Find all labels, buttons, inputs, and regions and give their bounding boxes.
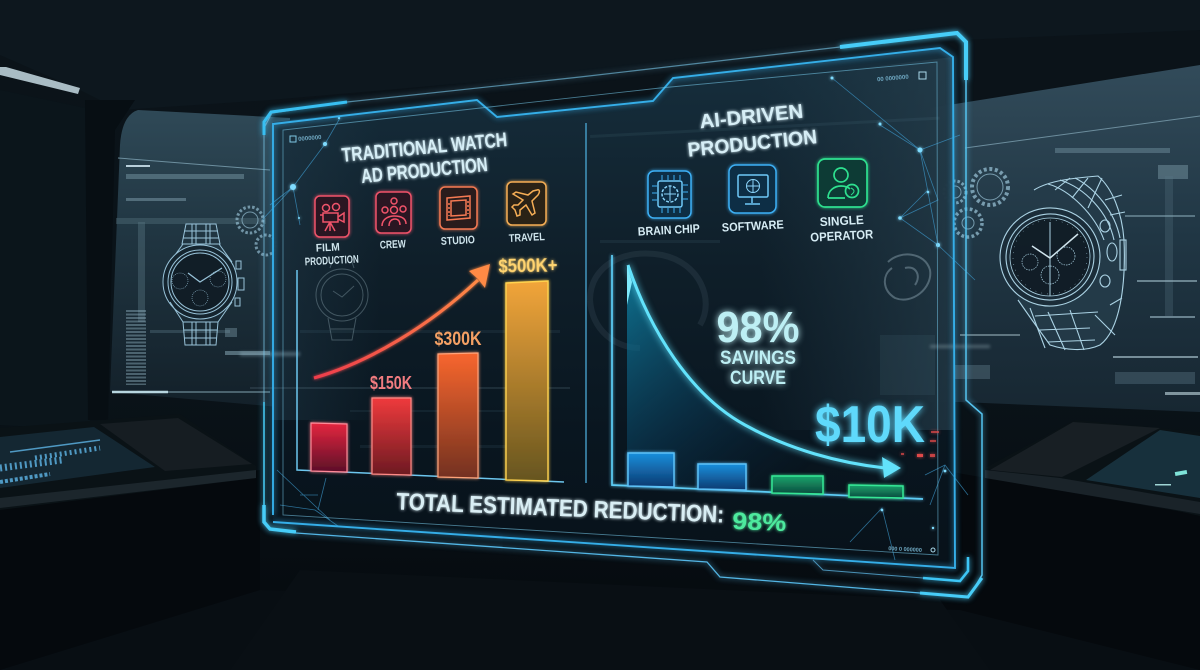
label: film production: PRODUCTION: [305, 254, 359, 268]
heading: traditional: AD PRODUCTION: [360, 154, 489, 188]
faint globe ghost inside panel: [590, 253, 706, 348]
gears right: [944, 169, 1008, 237]
icon: software: [729, 165, 776, 213]
bar 2: [372, 398, 411, 475]
axis: [297, 270, 564, 482]
callout: 98% savings curve: [716, 303, 800, 389]
heading: traditional: TRADITIONAL WATCH: [341, 129, 508, 167]
area under savings curve: [627, 265, 885, 490]
frame corner marks: 00 0000000: [877, 75, 910, 83]
chart: traditional costs: [297, 255, 564, 482]
frame corner marks: [290, 72, 935, 554]
icon: brain chip: [648, 171, 691, 218]
heading: AI-driven: AI-DRIVEN: [699, 101, 804, 133]
panel frame: [264, 33, 982, 597]
value $150K: $150K: [370, 373, 412, 393]
bar 1: [311, 423, 347, 472]
right holographic window: [930, 65, 1200, 412]
label: single operator: [810, 213, 874, 245]
ceiling light strip: [0, 67, 80, 94]
label: film production: FILM: [316, 241, 340, 255]
label: software: SOFTWARE: [721, 217, 784, 235]
label: brain chip: BRAIN CHIP: [637, 221, 700, 239]
frame corner marks: 000 0 000000: [888, 546, 922, 554]
icon: travel: [507, 182, 546, 225]
bar 3: [438, 353, 478, 478]
bar 1: [628, 453, 674, 487]
bar 3: [772, 476, 823, 494]
total reduction statement: TOTAL ESTIMATED REDUCTION:: [396, 488, 725, 529]
panel divider: [585, 123, 587, 483]
label: studio: STUDIO: [441, 234, 475, 248]
rising cost arrow: [314, 264, 490, 378]
icon: crew: [376, 192, 411, 233]
label: film production: [305, 241, 359, 268]
bar 2: [698, 464, 746, 490]
curve base wedge: [627, 265, 632, 305]
faint gear ghost inside panel: [885, 254, 930, 300]
savings curve arrow: [628, 265, 901, 478]
value $500K+: $500K+: [498, 255, 558, 278]
red indicator lights: [901, 431, 939, 457]
label: single operator: SINGLE: [819, 213, 864, 229]
inner thin frame: [283, 62, 938, 555]
icon: film production: [315, 196, 349, 237]
callout: 98% savings curve: SAVINGS: [720, 348, 796, 369]
right console: [985, 420, 1200, 516]
label: crew: CREW: [380, 238, 407, 252]
heading: AI-driven: [687, 101, 818, 162]
label: travel: TRAVEL: [509, 231, 545, 245]
total reduction statement: 98%: [732, 508, 787, 537]
callout: 98% savings curve: CURVE: [730, 368, 786, 389]
bar 4: [506, 281, 548, 481]
faint watch ghost inside panel: [316, 262, 368, 340]
wireframe watch right: [994, 176, 1126, 350]
frame corner marks: 0000000: [298, 135, 322, 143]
icon: studio: [440, 187, 477, 229]
wireframe watch left: [163, 224, 244, 345]
holographic panel glass: [240, 48, 990, 568]
network nodes: [290, 76, 946, 529]
bar 4: [849, 485, 903, 498]
heading: AI-driven: PRODUCTION: [687, 126, 818, 162]
heading: traditional: [341, 129, 508, 188]
gears left: [237, 207, 276, 255]
axis: [612, 255, 923, 499]
left holographic window: [110, 110, 290, 408]
left console: [0, 414, 256, 510]
icon: single operator: [818, 159, 867, 207]
label: single operator: OPERATOR: [810, 227, 874, 245]
callout: $10K: $10K: [815, 396, 925, 454]
value $300K: $300K: [434, 329, 482, 350]
callout: 98% savings curve: 98%: [716, 303, 800, 352]
chart: AI-driven costs: [612, 255, 923, 499]
network lines: [262, 78, 975, 560]
